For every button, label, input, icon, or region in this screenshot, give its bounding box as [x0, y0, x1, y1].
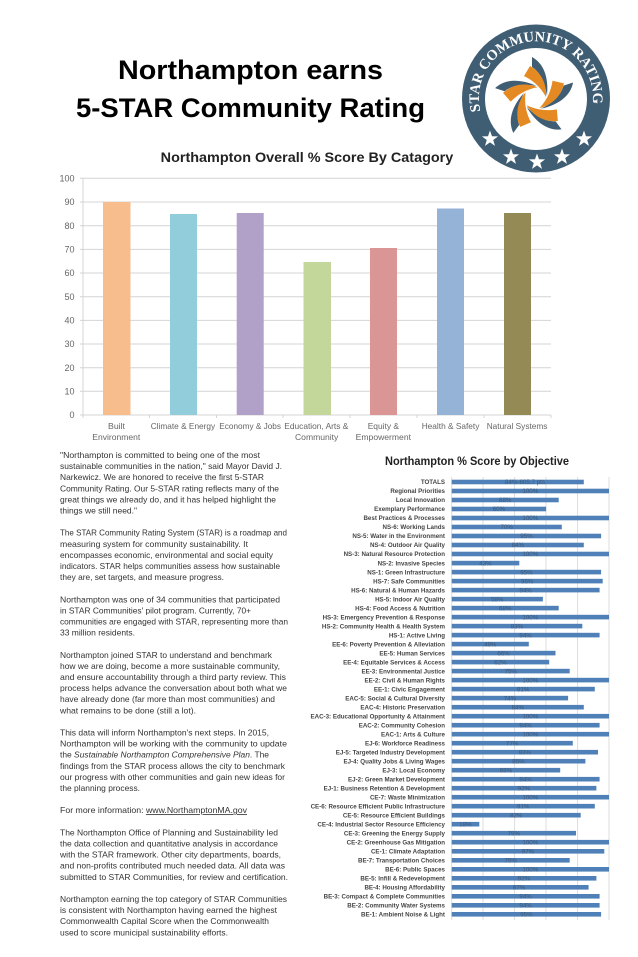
category labels: Empowerment	[356, 432, 412, 442]
row: HS-6: 94%	[519, 587, 532, 594]
row: EJ-3: EJ-3: Local Economy	[382, 767, 446, 774]
row: CE-5: 82%	[510, 812, 523, 819]
row: EAC-2: EAC-2: Community Cohesion	[359, 722, 445, 729]
text block: article body: great things we already do, and it has helped highlight the	[60, 494, 276, 504]
row: Regional Priorities	[390, 488, 609, 495]
row: EE-2: 100%	[522, 677, 539, 684]
row: BE-1: 95%	[520, 911, 533, 918]
row: EAC-5: 74%	[504, 695, 517, 702]
category labels: Education, Arts &	[284, 421, 349, 431]
text block: article body: Narkewicz. We are honored to receive the first 5-STAR	[60, 472, 264, 482]
row: CE-3	[344, 830, 576, 837]
row: BE-3: 94%	[519, 893, 532, 900]
y axis labels: 20	[64, 363, 74, 373]
text block: article body: indicators. STAR helps communities assess how sustainable	[60, 561, 280, 571]
row: BE-4: BE-4: Housing Affordability	[364, 884, 446, 891]
row: NS-3: NS-3: Natural Resource Protection	[344, 551, 445, 558]
y axis labels: 100	[59, 174, 74, 184]
row: NS-1: NS-1: Green Infrastructure	[367, 569, 446, 576]
text block: article body: have already done (far more than most communities) and	[60, 694, 275, 704]
row: EAC-2: 94%	[519, 722, 532, 729]
row: HS-7: 96%	[521, 578, 534, 585]
row: BE-6: 100%	[522, 866, 539, 873]
row: BE-3: BE-3: Compact & Complete Communities	[324, 893, 446, 900]
row: HS-3: 100%	[522, 614, 539, 621]
y axis labels: 10	[64, 386, 74, 396]
row: BE-2: 94%	[519, 902, 532, 909]
text block: article body: how we are doing, become a more sustainable community,	[60, 661, 280, 671]
row: Exemplary Performance: Exemplary Performance	[374, 506, 446, 513]
row: CE-6: 91%	[517, 803, 530, 810]
row: EE-4: 62%	[494, 659, 507, 666]
row: BE-1: BE-1: Ambient Noise & Light	[361, 911, 445, 918]
row: EJ-6	[365, 740, 573, 747]
row: HS-4	[355, 605, 559, 612]
row: NS-5: NS-5: Water in the Environment	[352, 533, 445, 540]
row: EAC-4	[360, 704, 584, 711]
row: HS-7	[373, 578, 603, 585]
row: EJ-2: 94%	[519, 776, 532, 783]
row: BE-5: BE-5: Infill & Redevelopment	[360, 875, 445, 882]
badge stars	[482, 130, 592, 169]
row: HS-1	[389, 632, 600, 639]
row: CE-1	[371, 848, 604, 856]
row: HS-5: 58%	[491, 596, 504, 603]
category labels: Health & Safety	[422, 421, 480, 431]
row: EJ-6: EJ-6: Workforce Readiness	[365, 740, 446, 747]
row: HS-2	[322, 623, 582, 630]
row: BE-7: BE-7: Transportation Choices	[358, 857, 446, 864]
row: NS-1	[367, 569, 601, 576]
text block: article body: process helps advance the conversation about both what we	[60, 683, 287, 693]
row: EE-4: EE-4: Equitable Services & Access	[343, 659, 446, 666]
row: NS-6: 70%	[501, 524, 513, 531]
badge swirl star	[493, 57, 578, 138]
heading: objective chart: Northampton % Score by Objective	[385, 456, 569, 468]
badge ring text: STAR COMMUNITY RATING	[469, 32, 603, 112]
row: BE-2: BE-2: Community Water Systems	[347, 902, 446, 909]
text block: article body: The STAR Community Rating System (STAR) is a roadmap and	[60, 528, 287, 538]
row: EE-5: EE-5: Human Services	[379, 650, 446, 657]
category labels: Environment	[92, 432, 141, 442]
row: HS-1: HS-1: Active Living	[389, 632, 445, 639]
y axis labels	[59, 174, 74, 420]
text block: article body: Commonwealth Capital Score when the Commonwealth	[60, 916, 269, 926]
row: NS-2: 43%	[479, 560, 492, 567]
title: Northampton earns	[118, 55, 383, 85]
y axis labels: 50	[64, 292, 74, 302]
row: EJ-4	[343, 758, 585, 765]
y axis labels: 80	[64, 221, 74, 231]
row: NS-2	[378, 560, 519, 567]
row: HS-2: HS-2: Community Health & Health System	[322, 623, 445, 630]
row: CE-5: CE-5: Resource Efficient Buildings	[343, 812, 446, 819]
category labels: Economy & Jobs	[219, 421, 281, 431]
row: Best Practices & Processes	[363, 515, 609, 522]
text block: article body: the Sustainable Northampton Comprehensive Plan . The	[60, 750, 269, 760]
bar: Natural Systems	[504, 213, 531, 415]
row: BE-3	[324, 894, 600, 900]
text block: article body	[59, 450, 288, 937]
row: BE-7	[358, 858, 570, 864]
row: EAC-3: 100%	[522, 713, 539, 720]
row: EE-5: 66%	[497, 650, 510, 657]
row: Local Innovation: 68%	[499, 497, 512, 504]
row: EJ-1	[324, 785, 596, 792]
row: TOTALS: TOTALS	[421, 479, 445, 486]
row: TOTALS: 84%-605.7 pts	[505, 479, 545, 486]
row: Best Practices & Processes: Best Practices & Processes	[363, 515, 446, 522]
text block: article body: with the STAR framework. Other city departments, boards,	[59, 850, 281, 860]
row: EE-4	[343, 659, 549, 666]
row: EE-6	[332, 641, 529, 648]
title	[76, 55, 425, 123]
row: CE-2	[347, 839, 609, 846]
text block: article body: This data will inform Northampton's next steps. In 2015,	[60, 728, 269, 738]
row: EAC-5	[345, 695, 568, 702]
row: EE-1: 91%	[517, 686, 530, 693]
text block: article body: things we still need."	[60, 506, 137, 516]
category labels: Equity &	[368, 421, 399, 431]
row: HS-5	[375, 596, 543, 603]
text block: article body: Northampton was one of 34 communities that participated	[60, 594, 280, 604]
text block: article body: our progress with other communities and gain new ideas for	[60, 772, 285, 782]
row: EAC-1	[381, 731, 609, 738]
row: CE-3: 79%	[508, 830, 520, 837]
row: EE-1	[374, 686, 595, 693]
text block: article body: communities are engaged with STAR, representing more than	[60, 616, 288, 626]
row: HS-4: HS-4: Food Access & Nutrition	[355, 605, 445, 612]
row: EE-1: EE-1: Civic Engagement	[374, 686, 445, 693]
y axis labels: 30	[64, 339, 74, 349]
text block: article body: The Northampton Office of Planning and Sustainability led	[60, 827, 278, 837]
bar chart: score by objective	[310, 477, 609, 920]
row: EAC-1: EAC-1: Arts & Culture	[381, 731, 446, 738]
category labels	[92, 421, 547, 442]
row: Exemplary Performance: 60%	[493, 506, 506, 513]
row: BE-2	[347, 902, 600, 910]
text block: article body: the planning process.	[60, 783, 140, 793]
row: EAC-1: 100%	[522, 731, 539, 738]
row: CE-7	[370, 794, 609, 801]
row: EAC-5: EAC-5: Social & Cultural Diversity	[345, 695, 446, 702]
row: HS-3	[323, 614, 609, 621]
text block: article body: Northampton earning the top category of STAR Communities	[60, 894, 287, 904]
row: Best Practices & Processes: 100%	[522, 515, 539, 522]
y axis labels: 90	[64, 197, 74, 207]
row: NS-6	[383, 524, 562, 531]
row: EJ-2: EJ-2: Green Market Development	[348, 776, 445, 783]
row: HS-2: 83%	[511, 623, 524, 630]
row: HS-5: HS-5: Indoor Air Quality	[375, 596, 446, 603]
category labels: Community	[295, 432, 339, 442]
row: BE-4	[364, 884, 589, 892]
text block: article body: and non-profits contributed much needed data. All data was	[60, 861, 285, 871]
row: EE-5	[379, 650, 556, 657]
text block: article body: the data collection and quantitative analysis in accordance	[60, 838, 278, 848]
text block: article body: measuring system for community sustainability. It	[60, 539, 249, 549]
row: NS-4	[370, 542, 584, 549]
row: NS-1: 95%	[520, 569, 533, 576]
bar: Climate & Energy	[170, 214, 197, 415]
row: EE-3: EE-3: Environmental Justice	[361, 668, 446, 675]
row: CE-3: CE-3: Greening the Energy Supply	[344, 830, 446, 837]
text block: article body: Community Rating. Our 5-STAR rating reflects many of the	[60, 483, 279, 493]
row: Exemplary Performance	[374, 506, 546, 513]
text block: article body: they are, set targets, and measure progress.	[60, 572, 224, 582]
text block: article body: is consistent with Northampton having earned the highest	[60, 905, 278, 915]
row: NS-4: 84%	[512, 542, 524, 549]
row: BE-5: 92%	[518, 875, 531, 882]
row: BE-5	[360, 876, 596, 882]
row: CE-2: CE-2: Greenhouse Gas Mitigation	[347, 839, 445, 846]
row: EJ-4: 85%	[512, 758, 525, 765]
row: Regional Priorities: Regional Priorities	[390, 488, 446, 495]
bar: Equity & Empowerment	[370, 248, 397, 415]
row: BE-6: BE-6: Public Spaces	[385, 866, 446, 873]
row: HS-6: HS-6: Natural & Human Hazards	[351, 587, 446, 594]
row: EE-6: 49%	[484, 641, 497, 648]
icon: STAR Community Rating badge	[462, 24, 610, 172]
row: CE-4: 18%	[459, 821, 472, 828]
y axis labels: 70	[64, 245, 74, 255]
row: EJ-5	[336, 749, 598, 756]
row: EAC-3	[310, 713, 609, 720]
row: EJ-3	[382, 767, 560, 774]
row: EJ-5: EJ-5: Targeted Industry Development	[336, 749, 445, 756]
text block: article body: sustainable communities in the nation," said Mayor David J.	[60, 461, 282, 471]
row: EJ-2	[348, 776, 600, 783]
row: EJ-3: 69%	[500, 767, 513, 774]
heading: overall score chart: Northampton Overall % Score By Catagory	[161, 149, 454, 165]
row: CE-1: 97%	[522, 848, 535, 855]
bar: Health & Safety	[437, 208, 464, 415]
row: NS-2: NS-2: Invasive Species	[378, 560, 446, 567]
bar: Economy & Jobs	[237, 213, 264, 415]
row: CE-7: CE-7: Waste Minimization	[370, 794, 445, 801]
row: EE-3: 75%	[505, 668, 517, 675]
row: HS-7: HS-7: Safe Communities	[373, 578, 446, 585]
category labels: Natural Systems	[487, 421, 547, 431]
text block: article body: in STAR Communities' pilot program. Currently, 70+	[60, 605, 251, 615]
text block: article body: used to score municipal sustainability efforts.	[60, 927, 228, 937]
bar chart: overall score by category	[59, 174, 551, 442]
row: HS-4: 68%	[499, 605, 512, 612]
row: EJ-1: EJ-1: Business Retention & Development	[324, 785, 445, 792]
row: Regional Priorities: 100%	[522, 488, 539, 495]
text block: article body: and ensure accountability through a third party review. This	[60, 672, 286, 682]
row: EE-3	[361, 668, 570, 675]
text block: article body: 33 million residents.	[60, 628, 135, 638]
y axis labels: 0	[69, 410, 74, 420]
category labels: Climate & Energy	[151, 421, 216, 431]
row: EAC-3: EAC-3: Educational Opportunity & Attainment	[310, 713, 445, 720]
row: NS-6: NS-6: Working Lands	[383, 524, 446, 531]
row: EJ-6: 77%	[506, 740, 519, 747]
title: 5-STAR Community Rating	[76, 93, 425, 123]
row: Local Innovation	[396, 497, 559, 504]
row: EE-6: EE-6: Poverty Prevention & Alleviation	[332, 641, 445, 648]
text block: article body: submitted to STAR Communities, for review and certification.	[60, 872, 288, 882]
row: CE-5	[343, 812, 581, 819]
text block: article body: what remains to be done (still a lot).	[59, 705, 196, 715]
row: CE-2: 100%	[522, 839, 539, 846]
row: EAC-4: 84%	[512, 704, 524, 711]
row: EJ-5: 93%	[519, 749, 531, 756]
text block: article body: Northampton joined STAR to understand and benchmark	[60, 650, 273, 660]
row: CE-1: CE-1: Climate Adaptation	[371, 848, 445, 855]
row: BE-7: 75%	[505, 857, 517, 864]
row: CE-7: 100%	[522, 794, 539, 801]
row: EE-2	[365, 677, 609, 684]
row: NS-5: 95%	[520, 533, 533, 540]
row: Local Innovation: Local Innovation	[396, 497, 445, 504]
row: CE-4: CE-4: Industrial Sector Resource Efficiency	[317, 821, 446, 828]
row: EJ-1: 92%	[518, 785, 531, 792]
row: BE-6	[385, 866, 609, 874]
bar: Built Environment	[103, 202, 130, 415]
row: EJ-4: EJ-4: Quality Jobs & Living Wages	[343, 758, 446, 765]
row: HS-1: 94%	[519, 632, 532, 639]
y axis labels: 60	[64, 268, 74, 278]
category labels: Built	[108, 421, 126, 431]
row: CE-6	[311, 803, 595, 810]
y axis labels: 40	[64, 316, 74, 326]
row: NS-3: 100%	[522, 551, 539, 558]
row: EE-2: EE-2: Civil & Human Rights	[365, 677, 446, 684]
row: TOTALS	[421, 479, 584, 486]
text block: article body: encompasses economic, environmental and social equity	[60, 550, 274, 560]
bar: Education, Arts & Community	[304, 262, 331, 415]
row: NS-3	[344, 551, 609, 558]
row: HS-6	[351, 587, 600, 594]
row: EAC-4: EAC-4: Historic Preservation	[360, 704, 445, 711]
row: EAC-2	[359, 722, 600, 729]
row: NS-4: NS-4: Outdoor Air Quality	[370, 542, 446, 549]
text block: article body: findings from the STAR process allows the city to benchmark	[60, 761, 286, 771]
text block: article body: "Northampton is committed to being one of the most	[60, 450, 261, 460]
row: NS-5	[352, 533, 601, 540]
row: CE-6: CE-6: Resource Efficient Public Infrastructure	[311, 803, 446, 810]
row: HS-3: HS-3: Emergency Prevention & Response	[323, 614, 446, 621]
text block: article body: Northampton will be working with the community to update	[60, 739, 287, 749]
row: BE-1	[361, 912, 601, 918]
text block: article body: For more information: www.NorthamptonMA.gov	[60, 805, 248, 815]
row: BE-4: 87%	[513, 884, 526, 891]
